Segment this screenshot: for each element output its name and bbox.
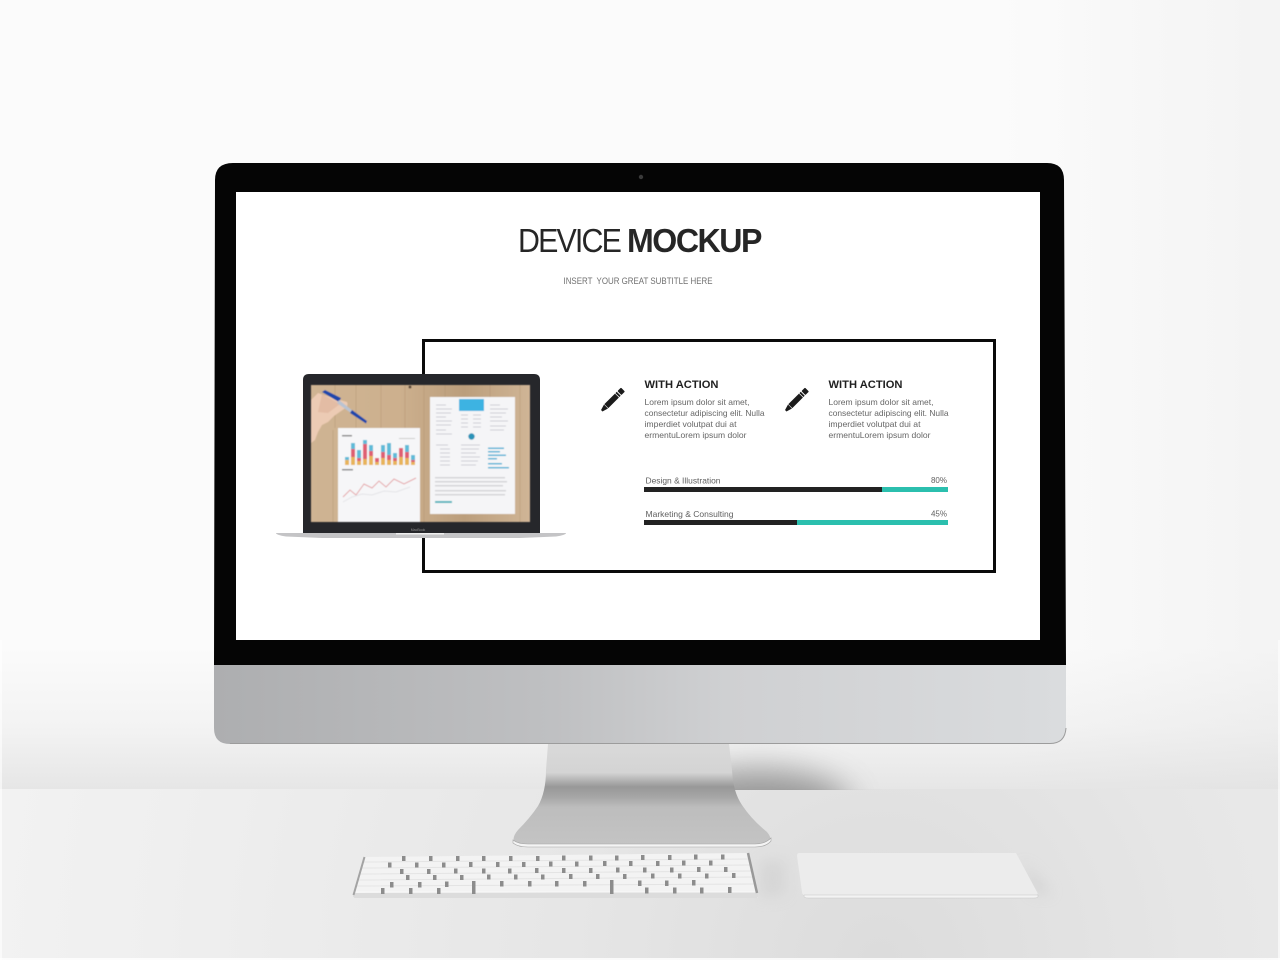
progress: marketing and consulting: 45% (931, 510, 947, 518)
body text: ermentuLorem ipsum dolor (644, 430, 747, 440)
key row gaps (356, 859, 756, 886)
title: DEVICE (518, 222, 621, 259)
right paper: resume (430, 397, 515, 514)
progress: marketing and consulting: Marketing & Consulting (646, 509, 734, 519)
body text (644, 397, 765, 440)
trackpad shadow (1022, 862, 1052, 893)
body text: consectetur adipiscing elit. Nulla (644, 408, 765, 418)
monitor chin (214, 664, 1066, 744)
title: MOCKUP (627, 222, 761, 259)
monitor bezel (214, 163, 1066, 665)
keyboard shadow (760, 860, 785, 898)
laptop label: MacBook (411, 528, 426, 532)
progress: design and illustration (644, 476, 948, 492)
feature 2 (784, 379, 949, 440)
body text: imperdiet volutpat dui at (644, 419, 737, 429)
progress: design and illustration: Design & Illustration (646, 476, 721, 486)
icon: pen (784, 388, 809, 413)
progress: design and illustration: 80% (931, 476, 947, 485)
laptop photo: desk with charts (311, 385, 530, 522)
monitor (214, 163, 1066, 744)
monitor stand (513, 744, 771, 847)
keyboard body (353, 853, 758, 898)
heading: WITH ACTION (644, 379, 719, 391)
keyboard side edges (354, 857, 364, 895)
subtitle: INSERT YOUR GREAT SUBTITLE HERE (564, 276, 712, 286)
keyboard (353, 853, 785, 898)
feature 1 (600, 379, 765, 440)
body text: Lorem ipsum dolor sit amet, (644, 397, 750, 407)
key gaps (381, 854, 736, 894)
trackpad surface (797, 853, 1038, 895)
body text: ermentuLorem ipsum dolor (828, 430, 931, 440)
heading: WITH ACTION (828, 379, 903, 391)
body text: consectetur adipiscing elit. Nulla (828, 408, 949, 418)
body text: imperdiet volutpat dui at (828, 419, 921, 429)
left paper: bar and line charts (338, 428, 420, 522)
laptop (276, 374, 566, 538)
icon: pen (600, 388, 625, 413)
body text (828, 397, 949, 440)
screen (236, 192, 1040, 640)
hand and pen (311, 393, 348, 443)
laptop body (303, 374, 540, 533)
content frame (424, 340, 994, 572)
title (518, 222, 761, 259)
progress: marketing and consulting (644, 509, 948, 525)
trackpad (797, 853, 1052, 898)
body text: Lorem ipsum dolor sit amet, (828, 397, 934, 407)
background: wall and desk (0, 640, 1280, 960)
webcam (639, 175, 643, 179)
